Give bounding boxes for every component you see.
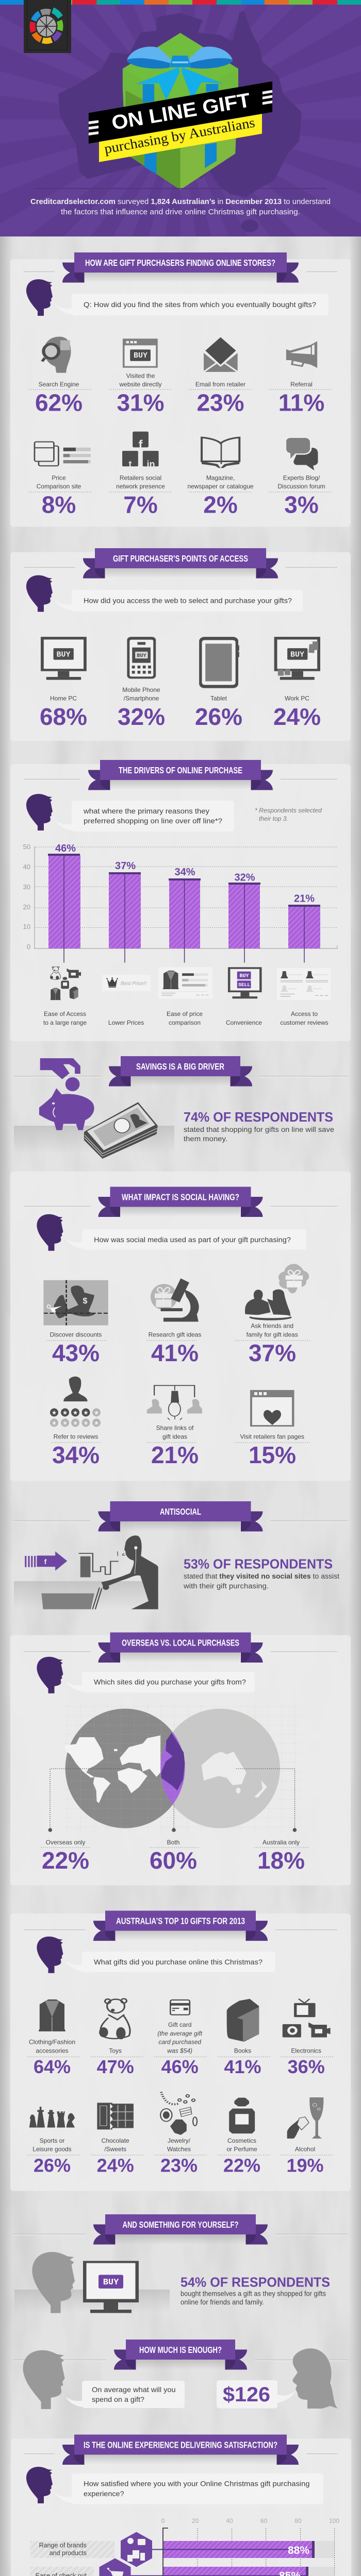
gift: sports or leisure goods xyxy=(27,2107,80,2176)
stat: refer to reviews: Refer to reviews xyxy=(54,1433,98,1440)
stat: share links of gift ideas: gift ideas xyxy=(162,1433,187,1440)
question bubble: experience? xyxy=(84,2489,124,2498)
bar chart: satisfaction: 60 xyxy=(260,2517,268,2524)
stat: australia only: 18% xyxy=(257,1847,305,1874)
stat text: 74% of respondents xyxy=(184,1109,334,1143)
gift: cosmetics or perfume: or Perfume xyxy=(226,2146,257,2153)
stat: refer to reviews: ★ xyxy=(52,1409,57,1416)
bar chart: drivers: 50 xyxy=(23,843,30,851)
bar chart: drivers: 34% xyxy=(174,867,195,878)
icon: person at laptop ignoring social xyxy=(25,1535,158,1609)
stat: retailers social network presence: 7% xyxy=(123,492,158,518)
venn diagram: overseas and australia xyxy=(48,1704,302,1834)
driver: convenience: Convenience xyxy=(226,1019,262,1026)
section: antisocial xyxy=(13,1501,348,1609)
ribbon heading xyxy=(88,760,273,790)
gift: electronics xyxy=(281,1999,333,2077)
stat: share links of gift ideas xyxy=(146,1385,202,1468)
stat: share links of gift ideas: Share links of xyxy=(156,1424,194,1431)
gift: gift card: was $54) xyxy=(167,2047,192,2055)
gift: alcohol xyxy=(281,2097,333,2176)
stat: magazine newspaper or catalogue xyxy=(187,437,254,518)
bar chart: drivers: 10 xyxy=(23,923,30,930)
stat text: 53% of respondents: with their gift purchasing. xyxy=(183,1582,269,1590)
stat: australia only: Australia only xyxy=(262,1839,300,1846)
panel: gift purchaser's points of access xyxy=(10,548,351,741)
driver: ease of access to a large range xyxy=(43,967,87,1026)
stat: experts blog discussion forum: Discussion forum xyxy=(277,483,325,490)
ribbon heading: AND SOMETHING FOR YOURSELF? xyxy=(123,2219,238,2230)
section: and something for yourself xyxy=(13,2214,348,2313)
ribbon heading xyxy=(93,1911,268,1941)
stat: tablet: Tablet xyxy=(210,695,227,702)
stat: mobile phone smartphone: BUY xyxy=(137,653,146,659)
stat: price comparison site: Price xyxy=(52,474,66,481)
stat: discover discounts: 43% xyxy=(52,1340,100,1366)
stat: visited website directly: Visited the xyxy=(126,372,155,380)
bar chart: satisfaction: 40 xyxy=(226,2517,233,2524)
gift: cosmetics or perfume: Cosmetics xyxy=(227,2137,256,2144)
bar chart: drivers: 20 xyxy=(23,903,30,911)
ribbon heading: WHAT IMPACT IS SOCIAL HAVING? xyxy=(122,1192,239,1202)
bar chart: satisfaction: 20 xyxy=(192,2517,199,2524)
stat: experts blog discussion forum: 3% xyxy=(284,492,319,518)
gift: gift card: 46% xyxy=(161,2056,199,2077)
driver: convenience xyxy=(226,967,262,1026)
driver: ease of price comparison xyxy=(158,967,212,1026)
stat: both: 60% xyxy=(150,1847,197,1874)
stat: visited website directly: BUY xyxy=(134,351,147,360)
gift: electronics: Electronics xyxy=(291,2047,321,2055)
stat text: 54% of respondents: bought themselves a gift as they shopped for gifts xyxy=(180,2290,326,2298)
gift: electronics: 36% xyxy=(288,2056,325,2077)
stat: magazine newspaper or catalogue: newspaper or catalogue xyxy=(187,483,254,490)
stat: discover discounts xyxy=(43,1280,108,1366)
answer bubble and female head xyxy=(217,2348,338,2409)
stat: refer to reviews: ★ xyxy=(73,1409,78,1416)
gift: toys: Toys xyxy=(109,2047,122,2055)
row: range of brands and products xyxy=(30,2532,152,2567)
panel: is the online experience delivering satisfaction xyxy=(11,2435,351,2576)
bar chart: drivers: 0 xyxy=(27,943,30,951)
stat: visit retailers fan pages: Visit retailers fan pages xyxy=(240,1433,304,1440)
stat: research gift ideas: Research gift ideas xyxy=(149,1331,201,1338)
stat: refer to reviews: ★ xyxy=(94,1409,99,1416)
male head and question: On average what will you xyxy=(92,2385,176,2394)
stat: email from retailer: 23% xyxy=(196,389,244,416)
stat: ask friends and family xyxy=(235,1264,310,1366)
bar chart: drivers: 21% xyxy=(294,893,315,905)
stat: refer to reviews: ★ xyxy=(52,1419,57,1427)
driver: ease of access to a large range: Ease of Access xyxy=(44,1010,86,1018)
title ribbon: on line gift: ON LINE GIFT xyxy=(110,89,252,134)
gift: alcohol: 19% xyxy=(286,2155,324,2176)
stat: home pc: 68% xyxy=(40,703,87,730)
driver: ease of price comparison: comparison xyxy=(169,1019,201,1026)
stat: visited website directly: website directly xyxy=(119,381,162,388)
stat: ask friends and family: 37% xyxy=(249,1340,296,1366)
question bubble xyxy=(37,1657,255,1693)
driver: lower prices xyxy=(103,975,151,1026)
driver: ease of access to a large range: to a large range xyxy=(43,1019,87,1026)
question bubble: How satisfied where you with your Online Christmas gift purchasing xyxy=(84,2479,309,2487)
ribbon heading: THE DRIVERS OF ONLINE PURCHASE xyxy=(119,765,242,775)
question bubble xyxy=(37,1214,306,1251)
title ribbon: on line gift xyxy=(89,81,272,144)
stat: retailers social network presence: f xyxy=(138,438,143,452)
stat: magazine newspaper or catalogue: 2% xyxy=(203,492,238,518)
ribbon heading: SAVINGS IS A BIG DRIVER xyxy=(136,1061,224,1072)
stat: experts blog discussion forum: Experts Blog/ xyxy=(283,474,320,481)
bar chart: satisfaction: 80 xyxy=(294,2517,302,2524)
footnote: * Respondents selected xyxy=(255,807,322,814)
driver: convenience: SELL xyxy=(238,982,250,988)
gift: books xyxy=(218,1999,270,2077)
gift: chocolate sweets: Chocolate xyxy=(102,2137,129,2144)
ribbon heading xyxy=(93,2214,268,2244)
stat text: 54% of respondents: 54% OF RESPONDENTS xyxy=(180,2275,330,2290)
driver: lower prices: Best Price!! xyxy=(121,981,146,987)
stat: refer to reviews: ★ xyxy=(83,1419,89,1427)
stat: retailers social network presence: Retailers social xyxy=(120,474,161,481)
ribbon heading xyxy=(109,1056,252,1086)
bar chart: drivers: 46% xyxy=(55,843,76,854)
stat text: 53% of respondents xyxy=(183,1556,339,1590)
question bubble: What gifts did you purchase online this Christmas? xyxy=(94,1958,262,1966)
stat text: 54% of respondents: online for friends and family. xyxy=(180,2298,264,2306)
stat: retailers social network presence: t xyxy=(129,459,132,469)
ribbon heading xyxy=(98,1501,263,1531)
stat: refer to reviews: ★ xyxy=(73,1419,78,1427)
gift: gift card xyxy=(154,2000,206,2077)
ribbon heading: OVERSEAS VS. LOCAL PURCHASES xyxy=(122,1637,239,1648)
stat: refer to reviews: ★ xyxy=(83,1409,89,1416)
header hero panel xyxy=(0,0,361,253)
gift: cosmetics or perfume: 22% xyxy=(223,2155,260,2176)
stat: email from retailer xyxy=(189,337,252,416)
gift: gift card: Gift card xyxy=(168,2021,191,2028)
stat: work pc: Work PC xyxy=(285,695,309,702)
driver: ease of price comparison: Ease of price xyxy=(167,1010,203,1018)
ribbon heading: AUSTRALIA’S TOP 10 GIFTS FOR 2013 xyxy=(116,1916,245,1926)
gift: gift card: card purchased xyxy=(158,2039,201,2046)
stat: search engine xyxy=(29,336,92,416)
gift: jewelry watches xyxy=(154,2092,206,2176)
ribbon heading: IS THE ONLINE EXPERIENCE DELIVERING SATISFACTION? xyxy=(84,2440,277,2450)
section: antisocial: f xyxy=(44,1557,47,1566)
gift: jewelry watches: Watches xyxy=(167,2146,191,2153)
male head and question xyxy=(23,2350,185,2409)
panel: australia's top 10 gifts for 2013 xyxy=(10,1911,351,2191)
driver: access to customer reviews xyxy=(277,968,331,1026)
stat: referral: Referral xyxy=(290,381,313,388)
subtitle ribbon: purchasing by australians: purchasing by Australians xyxy=(103,114,256,157)
gift: clothing fashion accessories: 64% xyxy=(34,2056,71,2077)
bar chart: satisfaction xyxy=(115,2517,339,2576)
stat: price comparison site: Comparison site xyxy=(37,483,81,490)
stat text: 74% of respondents: 74% OF RESPONDENTS xyxy=(184,1109,333,1125)
gift: clothing fashion accessories: accessories xyxy=(36,2047,69,2055)
bar chart: drivers: 30 xyxy=(23,883,30,891)
stat: tablet xyxy=(195,637,242,730)
stat: overseas only: Overseas only xyxy=(46,1839,85,1846)
stat: work pc: BUY xyxy=(290,650,304,659)
ribbon heading xyxy=(62,2435,299,2465)
stat: visited website directly xyxy=(109,338,172,416)
panel: what impact is social having xyxy=(10,1172,351,1481)
gift: chocolate sweets: /Sweets xyxy=(104,2146,126,2153)
panel: overseas vs local purchases xyxy=(10,1632,351,1886)
stat: work pc: 24% xyxy=(273,703,321,730)
icon: gift box with bow xyxy=(123,33,238,190)
stat: discover discounts: Discover discounts xyxy=(50,1331,102,1338)
stat text: 53% of respondents: 53% OF RESPONDENTS xyxy=(184,1556,333,1572)
gift: jewelry watches: Jewelry/ xyxy=(168,2137,191,2144)
icon: head looking at monitor with buy button xyxy=(32,2252,139,2313)
stat: mobile phone smartphone xyxy=(118,637,165,730)
question bubble xyxy=(26,279,329,316)
stat: work pc xyxy=(273,637,321,730)
intro text: the factors that influence and drive online Christmas gift purchasing. xyxy=(61,208,300,216)
stat text: 54% of respondents xyxy=(180,2275,330,2306)
bar chart: drivers: 40 xyxy=(23,863,30,871)
asia detail in overlap xyxy=(161,1733,185,1790)
bar chart: satisfaction: 0 xyxy=(161,2517,165,2524)
gift: chocolate sweets: 24% xyxy=(97,2155,134,2176)
world map in left circle xyxy=(64,1735,160,1803)
stat: mobile phone smartphone: /Smartphone xyxy=(124,695,159,702)
gift: sports or leisure goods: Leisure goods xyxy=(32,2146,72,2153)
stat: retailers social network presence: network presence xyxy=(116,483,165,490)
driver: convenience: BUY xyxy=(239,974,249,979)
ribbon heading xyxy=(98,1187,263,1217)
question bubble: How did you access the web to select and purchase your gifts? xyxy=(84,597,292,605)
section: how much is enough xyxy=(13,2340,348,2409)
gift: sports or leisure goods: 26% xyxy=(34,2155,71,2176)
stat: refer to reviews: ★ xyxy=(62,1409,68,1416)
ribbon heading: ANTISOCIAL xyxy=(160,1506,201,1517)
stat: magazine newspaper or catalogue: Magazine, xyxy=(206,474,235,481)
answer bubble and female head: $126 xyxy=(223,2383,270,2406)
australia silhouette xyxy=(58,11,302,232)
gift: clothing fashion accessories: Clothing/Fashion xyxy=(29,2039,75,2046)
colour stripe: top xyxy=(0,0,361,5)
bar chart: satisfaction: 88% xyxy=(288,2545,309,2556)
ribbon heading: HOW MUCH IS ENOUGH? xyxy=(139,2345,222,2355)
stat: tablet: 26% xyxy=(195,703,242,730)
stat: email from retailer: Email from retailer xyxy=(195,381,245,388)
section: savings is a big driver xyxy=(13,1056,348,1159)
stat: retailers social network presence: in xyxy=(146,459,155,469)
stat: visit retailers fan pages xyxy=(235,1390,310,1468)
stat: ask friends and family: family for gift ideas xyxy=(247,1331,298,1338)
stat text: 74% of respondents: stated that shopping for gifts on line will save xyxy=(184,1126,334,1133)
gift: chocolate sweets xyxy=(91,2103,143,2176)
icon: stack of money xyxy=(84,1102,158,1159)
stat: ask friends and family: Ask friends and xyxy=(251,1322,293,1329)
stat: both: Both xyxy=(167,1839,179,1846)
driver: access to customer reviews: customer reviews xyxy=(280,1019,329,1026)
question bubble: How was social media used as part of your gift purchasing? xyxy=(94,1235,291,1244)
ribbon heading xyxy=(62,252,299,282)
stat: discover discounts: $ xyxy=(83,1297,88,1306)
bar chart: drivers: 32% xyxy=(234,872,255,884)
stat: search engine: Search Engine xyxy=(39,381,79,388)
stat: mobile phone smartphone: Mobile Phone xyxy=(122,686,160,693)
stat: experts blog discussion forum xyxy=(269,437,332,518)
gift: books: 41% xyxy=(224,2056,261,2077)
stat: home pc: BUY xyxy=(56,650,71,659)
question bubble xyxy=(26,794,234,832)
stat: price comparison site: 8% xyxy=(42,492,76,518)
stat: refer to reviews: ★ xyxy=(94,1419,99,1427)
stat: home pc xyxy=(40,637,87,730)
row: range of brands and products: and products xyxy=(50,2549,87,2556)
stat: referral: 11% xyxy=(278,389,324,416)
gift: toys: 47% xyxy=(97,2056,134,2077)
stat: overseas only: 22% xyxy=(42,1847,89,1874)
footnote xyxy=(255,807,322,822)
gift: clothing fashion accessories xyxy=(27,1999,80,2077)
gift: gift card: (the average gift xyxy=(157,2030,203,2037)
ribbon heading: HOW ARE GIFT PURCHASERS FINDING ONLINE STORES? xyxy=(85,258,275,268)
stat: referral xyxy=(269,341,332,416)
footnote: their top 3. xyxy=(259,815,288,822)
driver: access to customer reviews: Access to xyxy=(291,1010,318,1018)
stat: home pc: Home PC xyxy=(50,695,77,702)
gift: cosmetics or perfume xyxy=(218,2098,270,2176)
stat: research gift ideas: 41% xyxy=(151,1340,199,1366)
ribbon heading xyxy=(83,548,278,578)
question bubble: Q: How did you find the sites from which you eventually bought gifts? xyxy=(84,300,316,309)
question bubble: preferred shopping on line over off line*? xyxy=(84,817,222,825)
icon: head looking at monitor with buy button: BUY xyxy=(103,2278,119,2287)
row: range of brands and products: Range of brands xyxy=(39,2542,87,2549)
logo tab xyxy=(24,0,71,53)
stat: australia only xyxy=(254,1839,309,1874)
stat: price comparison site xyxy=(29,442,92,518)
gift: sports or leisure goods: Sports or xyxy=(40,2137,64,2144)
question bubble xyxy=(37,1937,275,1973)
question bubble xyxy=(26,575,303,612)
ribbon heading xyxy=(114,2340,247,2370)
stat: visited website directly: 31% xyxy=(117,389,165,416)
stat: refer to reviews xyxy=(50,1377,101,1468)
stat: mobile phone smartphone: 32% xyxy=(118,703,165,730)
question bubble: what where the primary reasons they xyxy=(83,807,209,815)
stat: retailers social network presence xyxy=(109,432,172,518)
icon: piggy bank and hand xyxy=(39,1058,94,1130)
stat text: 74% of respondents: them money. xyxy=(184,1135,227,1143)
stat: share links of gift ideas: 21% xyxy=(151,1442,199,1468)
bar chart: drivers xyxy=(23,843,337,962)
ribbon heading xyxy=(98,1632,263,1663)
stat: search engine: 62% xyxy=(35,389,83,416)
panel: the drivers of online purchase xyxy=(10,760,351,1041)
gift: alcohol: Alcohol xyxy=(295,2146,315,2153)
gift: toys xyxy=(91,1998,143,2077)
bar chart: drivers: 37% xyxy=(115,860,136,872)
row: ease of check out xyxy=(30,2558,131,2576)
intro text xyxy=(30,197,331,216)
male head and question: spend on a gift? xyxy=(92,2395,144,2403)
ribbon heading: GIFT PURCHASER’S POINTS OF ACCESS xyxy=(113,553,248,564)
australia map in right circle xyxy=(202,1752,267,1798)
panel: how are gift purchasers finding online stores xyxy=(10,252,351,527)
driver: lower prices: Lower Prices xyxy=(108,1019,144,1026)
bar chart: satisfaction: 100 xyxy=(329,2517,339,2524)
question bubble: Which sites did you purchase your gifts from? xyxy=(94,1677,246,1686)
question bubble xyxy=(26,2467,323,2504)
gift: books: Books xyxy=(234,2047,251,2055)
stat text: 53% of respondents: stated that they visited no social sites to assist xyxy=(184,1572,339,1580)
intro text: Creditcardselector.com surveyed 1,824 Australian’s in December 2013 to understand xyxy=(30,197,331,206)
stat: research gift ideas xyxy=(146,1278,201,1366)
stat: visit retailers fan pages: 15% xyxy=(249,1442,296,1468)
stat: refer to reviews: ★ xyxy=(62,1419,68,1427)
stat: refer to reviews: 34% xyxy=(52,1442,100,1468)
gift: jewelry watches: 23% xyxy=(160,2155,198,2176)
